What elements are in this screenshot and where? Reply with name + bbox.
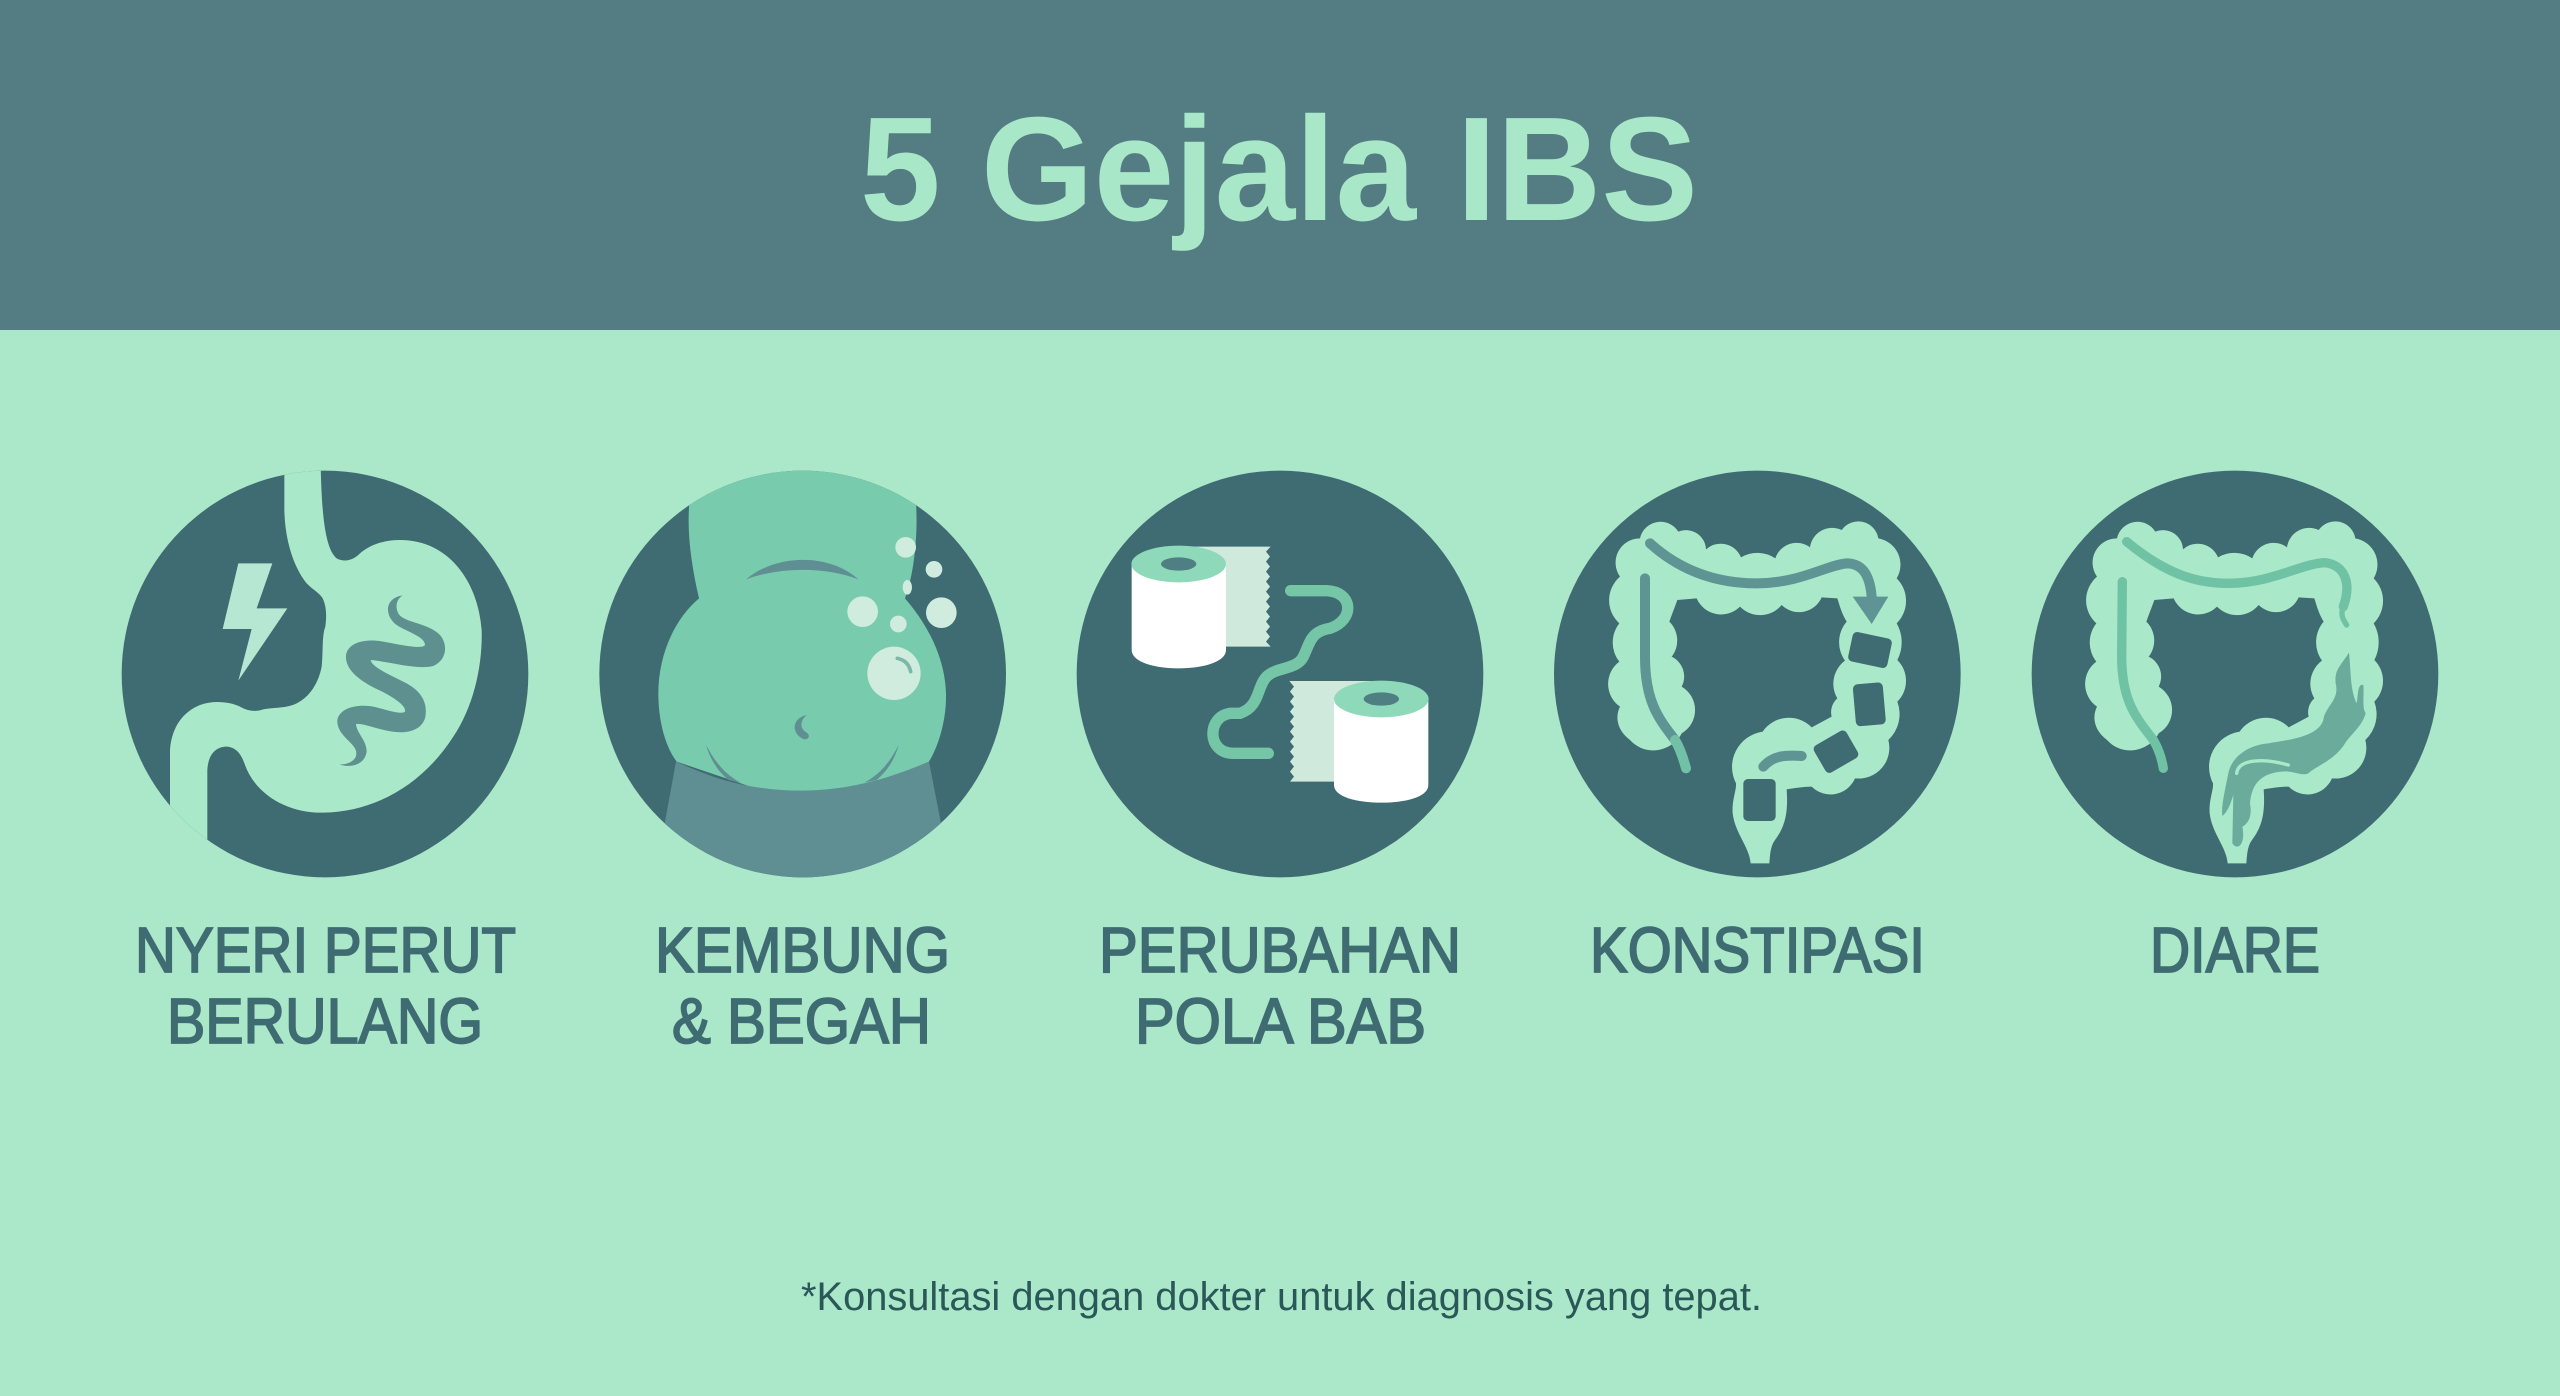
panel: konstipasi	[1554, 471, 1961, 986]
waistband	[665, 762, 941, 890]
colon shape	[2085, 521, 2383, 863]
label	[135, 914, 516, 1057]
title banner	[0, 0, 2560, 330]
label: KONSTIPASI	[1590, 914, 1925, 986]
highlight streak	[2237, 761, 2288, 773]
panel: diare	[2032, 471, 2438, 986]
footnote: *Konsultasi dengan dokter untuk diagnosis yang tepat.	[801, 1275, 1762, 1319]
icon: colon with watery stool	[2032, 471, 2438, 877]
label: NYERI PERUT	[135, 914, 516, 986]
panel: perubahan pola bab	[1077, 471, 1483, 1057]
colon flow arrow	[1645, 543, 1872, 768]
panel: kembung dan begah	[599, 463, 1006, 1057]
bottom roll sheet	[1289, 681, 1387, 782]
bottom roll	[1334, 681, 1429, 803]
label: & BEGAH	[672, 985, 931, 1057]
label: POLA BAB	[1135, 985, 1426, 1057]
top roll sheet	[1193, 547, 1271, 647]
stool blockages	[1743, 631, 1893, 821]
icon: bloated belly	[599, 463, 1006, 890]
colon lumen	[2122, 542, 2347, 768]
label: BERULANG	[167, 985, 483, 1057]
label: KEMBUNG	[655, 914, 950, 986]
icon: stomach with pain bolt	[122, 463, 528, 877]
gas bubbles	[847, 537, 957, 700]
icon: cramping squiggle	[337, 595, 445, 766]
title: 5 Gejala IBS	[860, 87, 1698, 252]
stomach shape	[170, 463, 482, 850]
label	[1099, 914, 1461, 1057]
panel: nyeri perut berulang	[122, 463, 528, 1057]
label: DIARE	[2150, 914, 2320, 986]
icon: colon with blockages	[1554, 471, 1961, 877]
watery stool	[2222, 653, 2366, 847]
colon shape	[1608, 521, 1906, 863]
icon: pain bolt	[223, 563, 287, 681]
body and belly	[658, 463, 946, 797]
icon: toilet rolls	[1077, 471, 1483, 877]
label	[655, 914, 950, 1057]
top roll	[1131, 546, 1226, 668]
belly folds	[706, 560, 899, 783]
label: PERUBAHAN	[1099, 914, 1461, 986]
wavy change line	[1213, 591, 1348, 753]
